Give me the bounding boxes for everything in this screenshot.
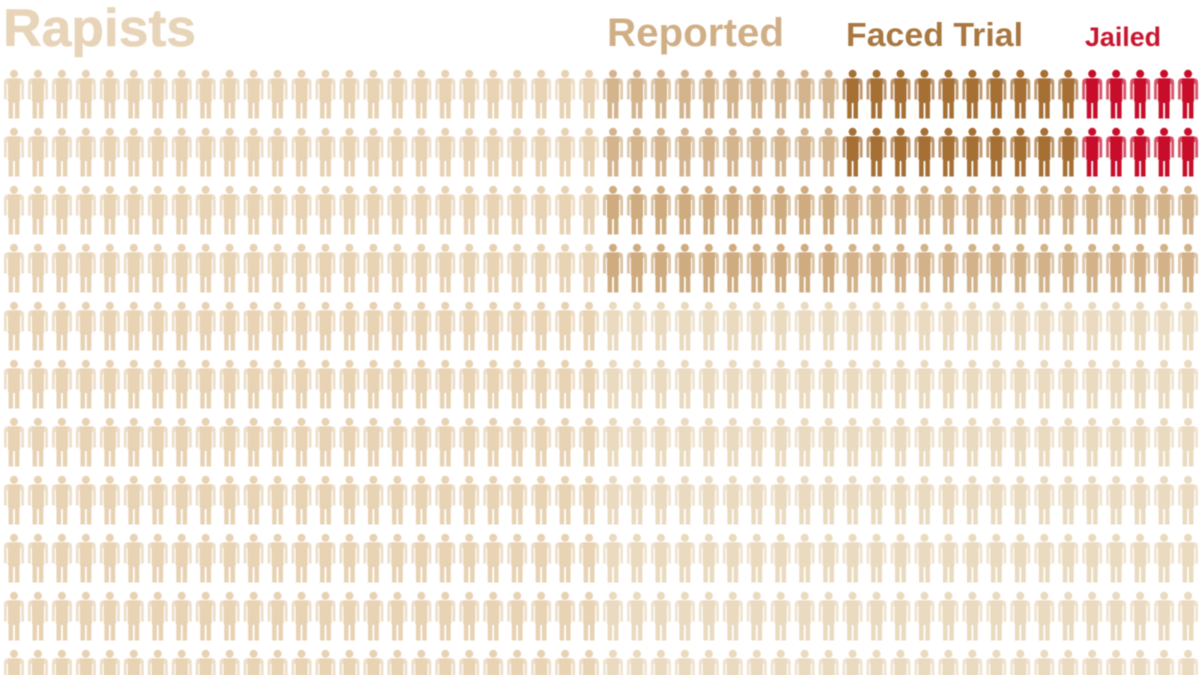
row 3: tan and reported figures	[4, 186, 1198, 234]
row 1: tan, reported, faced trial and jailed figures	[4, 70, 1198, 118]
row 9: tan figures	[4, 534, 1198, 582]
heading: Jailed: Jailed	[1085, 22, 1161, 52]
row 2: tan, reported, faced trial and jailed figures	[4, 128, 1198, 176]
heading: Faced Trial: Faced Trial	[846, 16, 1023, 53]
row 8: tan figures	[4, 476, 1198, 524]
row 10: tan figures	[4, 592, 1198, 640]
row 11: tan figures, cropped by the bottom edge	[4, 650, 1198, 675]
row 4: tan and reported figures	[4, 244, 1198, 292]
heading: Rapists: Rapists	[3, 0, 196, 58]
heading: Reported: Reported	[607, 11, 784, 55]
row 5: tan figures	[4, 302, 1198, 350]
row 7: tan figures	[4, 418, 1198, 466]
row 6: tan figures	[4, 360, 1198, 408]
